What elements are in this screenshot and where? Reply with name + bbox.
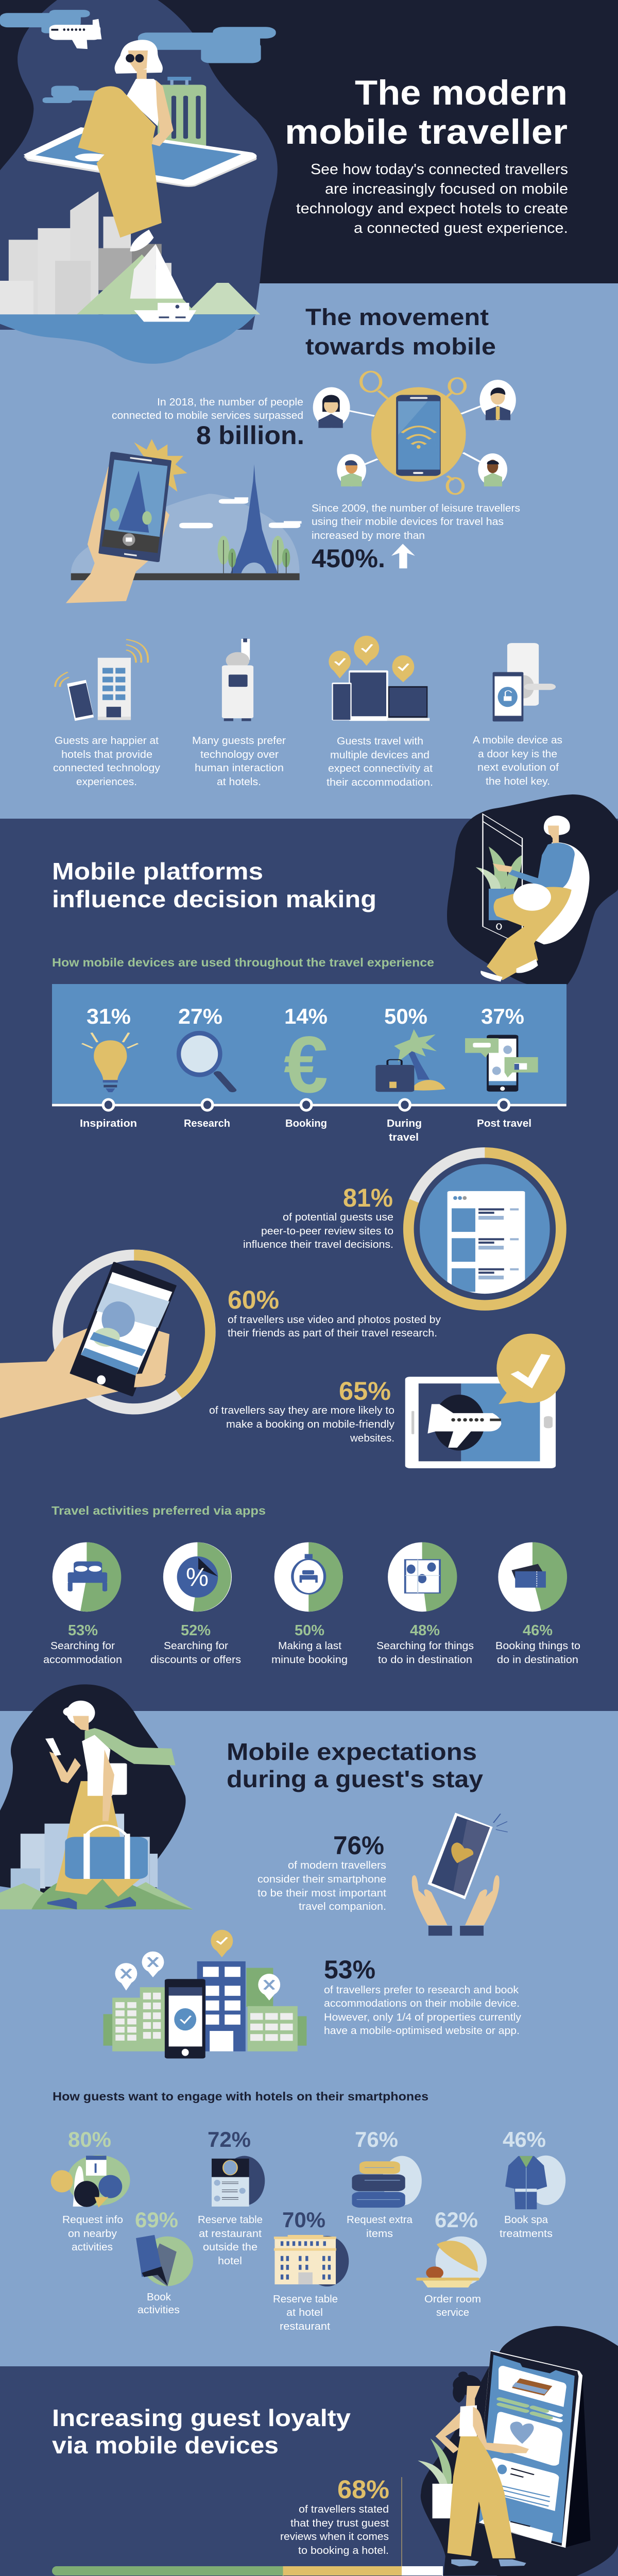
caption: book activities: Book bbox=[147, 2292, 171, 2303]
illustration: hotels with phone bbox=[104, 1930, 306, 2059]
icon: magnifying glass bbox=[177, 1031, 233, 1090]
caption: room service: Order room bbox=[424, 2294, 481, 2305]
text: 450% stat bbox=[312, 503, 520, 573]
illustration: photographing Eiffel Tower with a phone bbox=[66, 439, 301, 603]
53% label bbox=[43, 1622, 122, 1666]
engagement percentages: 72% bbox=[208, 2127, 251, 2151]
percentages: 27% bbox=[178, 1004, 222, 1028]
stat: 68%: 68% bbox=[337, 2475, 389, 2504]
icon: palm and suitcase bbox=[375, 1029, 445, 1092]
caption: room service bbox=[424, 2294, 481, 2318]
donut: 60% photos and hand with phone bbox=[0, 1249, 216, 1418]
caption: door key: the hotel key. bbox=[486, 776, 550, 787]
percentages: 50% bbox=[384, 1004, 427, 1028]
stat: 76% travel companion: to be their most important bbox=[258, 1888, 386, 1899]
stat: 53% mobile booking: 53% bbox=[324, 1955, 375, 1984]
hero illustration: traveller sitting on a tablet bbox=[0, 0, 278, 364]
heading: increasing guest loyalty: via mobile devices bbox=[52, 2432, 279, 2459]
53% label: accommodation bbox=[43, 1654, 122, 1666]
pie chart: booking things to do bbox=[498, 1543, 567, 1612]
caption: multiple devices: Guests travel with bbox=[337, 736, 423, 747]
stat: 65% bbox=[209, 1377, 394, 1444]
icon: hotel with phone and wifi bbox=[55, 639, 148, 721]
caption: happier guests: experiences. bbox=[76, 776, 137, 788]
50% label: 50% bbox=[295, 1622, 324, 1639]
caption: door key: next evolution of bbox=[477, 762, 559, 773]
caption: reserve table outside: hotel bbox=[218, 2256, 242, 2267]
caption: book activities: activities bbox=[138, 2304, 180, 2316]
stat: 65%: 65% bbox=[339, 1377, 391, 1405]
stat: 76% travel companion: of modern travellers bbox=[288, 1860, 386, 1871]
stage labels: Inspiration bbox=[80, 1118, 137, 1129]
illustration: woman interacting with giant phone bbox=[418, 2326, 618, 2576]
48% label: to do in destination bbox=[378, 1654, 472, 1666]
stat: 65%: make a booking on mobile-friendly bbox=[226, 1419, 394, 1430]
caption: technology over human: technology over bbox=[200, 749, 279, 760]
illustration: tablet with plane and check bubble bbox=[405, 1334, 565, 1468]
chart: stacked loyalty bar bbox=[52, 2477, 443, 2576]
caption: multiple devices: their accommodation. bbox=[327, 777, 433, 788]
heading: the movement towards mobile bbox=[305, 304, 496, 360]
stat: 68%: of travellers stated bbox=[299, 2504, 389, 2515]
text: 8 billion stat: 8 billion. bbox=[196, 421, 304, 450]
46% label: do in destination bbox=[497, 1654, 578, 1666]
caption: reserve table outside: outside the bbox=[203, 2242, 258, 2253]
icon: multiple devices with check bubbles bbox=[329, 636, 430, 721]
illustration: walking woman with phone and bag bbox=[0, 1684, 193, 1909]
icon: phone with social bubbles bbox=[465, 1035, 538, 1092]
text: 8 billion stat: connected to mobile services surpassed bbox=[112, 410, 303, 421]
46% label: 46% bbox=[523, 1622, 553, 1639]
stat: 60% bbox=[228, 1285, 441, 1339]
heading: mobile expectations: Mobile expectations bbox=[227, 1738, 477, 1765]
stat: 68%: to booking a hotel. bbox=[298, 2545, 389, 2556]
caption: reserve table outside: Reserve table bbox=[198, 2214, 263, 2226]
caption: reserve table outside bbox=[198, 2214, 263, 2267]
panel: travel experience timeline bbox=[52, 984, 566, 1143]
pie chart: accommodation bbox=[53, 1543, 121, 1612]
caption: happier guests: hotels that provide bbox=[61, 749, 152, 760]
pie chart: things to do bbox=[388, 1542, 457, 1612]
46% label: Booking things to bbox=[495, 1640, 580, 1652]
stat: 76% travel companion: consider their smartphone bbox=[258, 1874, 386, 1885]
stat: 68% bbox=[280, 2475, 389, 2556]
engagement percentages: 69% bbox=[135, 2208, 178, 2232]
caption: technology over human bbox=[192, 735, 286, 788]
title bbox=[285, 73, 568, 151]
stat: 65%: of travellers say they are more likely to bbox=[209, 1405, 394, 1416]
stat: 76% travel companion: travel companion. bbox=[299, 1901, 386, 1912]
stat: 81%: influence their travel decisions. bbox=[243, 1239, 393, 1250]
caption: happier guests: connected technology bbox=[53, 762, 160, 774]
engagement percentages: 76% bbox=[355, 2127, 398, 2151]
heading: mobile platforms bbox=[52, 858, 376, 912]
caption: reserve table outside: at restaurant bbox=[199, 2228, 262, 2240]
title: mobile traveller bbox=[285, 112, 568, 151]
caption: multiple devices: multiple devices and bbox=[330, 750, 430, 761]
subheading: travel activities: Travel activities preferred via apps bbox=[52, 1504, 266, 1517]
stat: 60%: of travellers use video and photos posted by bbox=[228, 1314, 441, 1326]
caption: room service: service bbox=[436, 2307, 469, 2318]
stat: 53% mobile booking bbox=[324, 1955, 521, 2037]
caption: door key: A mobile device as bbox=[473, 735, 562, 746]
stage labels: Post travel bbox=[477, 1118, 531, 1129]
stat: 81%: peer-to-peer review sites to bbox=[261, 1226, 393, 1237]
stat: 81%: 81% bbox=[343, 1183, 393, 1212]
text: four benefit captions bbox=[53, 735, 562, 788]
subtitle: are increasingly focused on mobile bbox=[325, 181, 568, 197]
percentages bbox=[87, 1004, 524, 1028]
stage labels: travel bbox=[389, 1132, 419, 1143]
engagement percentages bbox=[68, 2127, 546, 2232]
timeline line and nodes bbox=[52, 1098, 566, 1112]
48% label bbox=[376, 1622, 474, 1666]
icon: room service bbox=[416, 2236, 487, 2287]
heading: mobile expectations: during a guest's stay bbox=[227, 1766, 483, 1792]
caption: happier guests: Guests are happier at bbox=[55, 735, 159, 747]
engagement percentages: 46% bbox=[503, 2127, 546, 2151]
heading: the movement towards mobile: The movement bbox=[305, 304, 489, 330]
engagement percentages: 80% bbox=[68, 2127, 111, 2151]
caption: technology over human: at hotels. bbox=[217, 776, 261, 788]
icon: light bulb bbox=[82, 1032, 138, 1092]
pie labels bbox=[43, 1622, 580, 1666]
caption: multiple devices bbox=[327, 736, 433, 788]
heading: mobile platforms: Mobile platforms bbox=[52, 858, 263, 885]
stage labels bbox=[80, 1118, 531, 1143]
heading: mobile expectations bbox=[227, 1738, 483, 1792]
subheading: how guests want to engage: How guests want to engage with hotels on their smartphones bbox=[53, 2090, 428, 2103]
icon: restaurant menu bbox=[212, 2156, 265, 2207]
icon: hotel restaurant bbox=[274, 2235, 349, 2286]
stat: 53% mobile booking: However, only 1/4 of properties currently bbox=[324, 2012, 521, 2023]
caption: door key: a door key is the bbox=[478, 749, 557, 760]
stat: 60%: their friends as part of their travel research. bbox=[228, 1328, 437, 1339]
title: The modern bbox=[355, 73, 568, 112]
stat: 53% mobile booking: have a mobile-optimised website or app. bbox=[324, 2025, 520, 2037]
percentages: 37% bbox=[481, 1004, 524, 1028]
caption: book activities bbox=[138, 2292, 180, 2316]
subheading: how mobile devices are used: How mobile devices are used throughout the travel experience bbox=[52, 956, 434, 969]
icon: bathrobe bbox=[505, 2156, 565, 2209]
percentages: 31% bbox=[87, 1004, 131, 1028]
caption: extra items: items bbox=[366, 2228, 393, 2240]
caption: reserve at hotel restaurant: Reserve table bbox=[273, 2294, 338, 2305]
52% label: discounts or offers bbox=[150, 1654, 241, 1666]
subtitle bbox=[296, 161, 568, 236]
illustration: hands and phone with heart bbox=[412, 1812, 508, 1936]
subtitle: See how today's connected travellers bbox=[311, 161, 568, 178]
stat: 81% bbox=[243, 1183, 393, 1250]
50% label bbox=[271, 1622, 348, 1666]
48% label: 48% bbox=[410, 1622, 440, 1639]
pie chart: last minute booking bbox=[274, 1543, 343, 1612]
engagement captions bbox=[62, 2214, 553, 2332]
icon: up arrow bbox=[391, 544, 415, 568]
stat: 53% mobile booking: accommodations on their mobile device. bbox=[324, 1998, 520, 2009]
stat: 76% travel companion: 76% bbox=[333, 1831, 384, 1860]
52% label: 52% bbox=[181, 1622, 211, 1639]
stage labels: Research bbox=[184, 1118, 230, 1129]
53% label: 53% bbox=[68, 1622, 98, 1639]
46% label bbox=[495, 1622, 580, 1666]
stat: 76% travel companion bbox=[258, 1831, 386, 1912]
text: 450% stat: Since 2009, the number of leisure travellers bbox=[312, 503, 520, 514]
text: 450% stat: increased by more than bbox=[312, 530, 425, 541]
pie chart: discounts bbox=[163, 1543, 232, 1612]
icon: phone as door key bbox=[493, 643, 556, 721]
icon: euro: € bbox=[284, 1020, 328, 1110]
caption: extra items bbox=[347, 2214, 413, 2240]
caption: reserve at hotel restaurant: at hotel bbox=[286, 2307, 323, 2318]
caption: reserve at hotel restaurant bbox=[273, 2294, 338, 2332]
caption: request info: Request info bbox=[62, 2214, 123, 2226]
caption: multiple devices: expect connectivity at bbox=[328, 763, 433, 774]
53% label: Searching for bbox=[50, 1640, 115, 1652]
52% label: Searching for bbox=[164, 1640, 228, 1652]
stat: 68%: reviews when it comes bbox=[280, 2531, 389, 2543]
stat: 60%: 60% bbox=[228, 1285, 279, 1314]
icon: towels bbox=[352, 2156, 422, 2208]
text: 450% stat: using their mobile devices for travel has bbox=[312, 516, 504, 528]
donut: 81% review sites bbox=[403, 1147, 566, 1311]
caption: request info bbox=[62, 2214, 123, 2253]
stat: 81%: of potential guests use bbox=[283, 1212, 393, 1223]
illustration: woman in chair using a virtual phone bbox=[447, 794, 618, 985]
icon: activity books bbox=[136, 2235, 193, 2286]
stat: 53% mobile booking: of travellers prefer to research and book bbox=[324, 1985, 519, 1996]
text: 8 billion stat bbox=[112, 397, 304, 450]
caption: request info: activities bbox=[72, 2242, 113, 2253]
text: 450% stat: 450%. bbox=[312, 544, 385, 573]
text: 8 billion stat: In 2018, the number of people bbox=[157, 397, 303, 408]
icon: connected phone network bbox=[313, 371, 516, 494]
percent sign in discount icon: % bbox=[186, 1563, 209, 1591]
caption: extra items: Request extra bbox=[347, 2214, 413, 2226]
50% label: Making a last bbox=[278, 1640, 341, 1652]
48% label: Searching for things bbox=[376, 1640, 474, 1652]
engagement percentages: 62% bbox=[435, 2208, 478, 2232]
50% label: minute booking bbox=[271, 1654, 348, 1666]
caption: door key bbox=[473, 735, 562, 787]
heading: the movement towards mobile: towards mobile bbox=[305, 333, 496, 360]
52% label bbox=[150, 1622, 241, 1666]
caption: spa bbox=[500, 2214, 553, 2240]
icon: sports activities bbox=[51, 2155, 130, 2208]
caption: technology over human: Many guests prefer bbox=[192, 735, 286, 747]
caption: spa: treatments bbox=[500, 2228, 553, 2240]
heading: increasing guest loyalty bbox=[52, 2404, 351, 2459]
stat: 68%: that they trust guest bbox=[290, 2518, 389, 2529]
heading: mobile platforms: influence decision making bbox=[52, 886, 376, 912]
heading: increasing guest loyalty: Increasing guest loyalty bbox=[52, 2404, 351, 2431]
caption: spa: Book spa bbox=[504, 2214, 548, 2226]
caption: reserve at hotel restaurant: restaurant bbox=[280, 2321, 330, 2332]
subtitle: technology and expect hotels to create bbox=[296, 200, 568, 217]
caption: technology over human: human interaction bbox=[195, 762, 284, 774]
caption: request info: on nearby bbox=[68, 2228, 117, 2240]
icon: hotel kiosk bbox=[222, 638, 253, 721]
stage labels: Booking bbox=[285, 1118, 327, 1129]
engagement percentages: 70% bbox=[282, 2208, 325, 2232]
stat: 65%: websites. bbox=[350, 1433, 394, 1444]
percentages: 14% bbox=[284, 1004, 328, 1028]
caption: happier guests bbox=[53, 735, 160, 788]
subtitle: a connected guest experience. bbox=[354, 220, 568, 236]
stage labels: During bbox=[387, 1118, 422, 1129]
